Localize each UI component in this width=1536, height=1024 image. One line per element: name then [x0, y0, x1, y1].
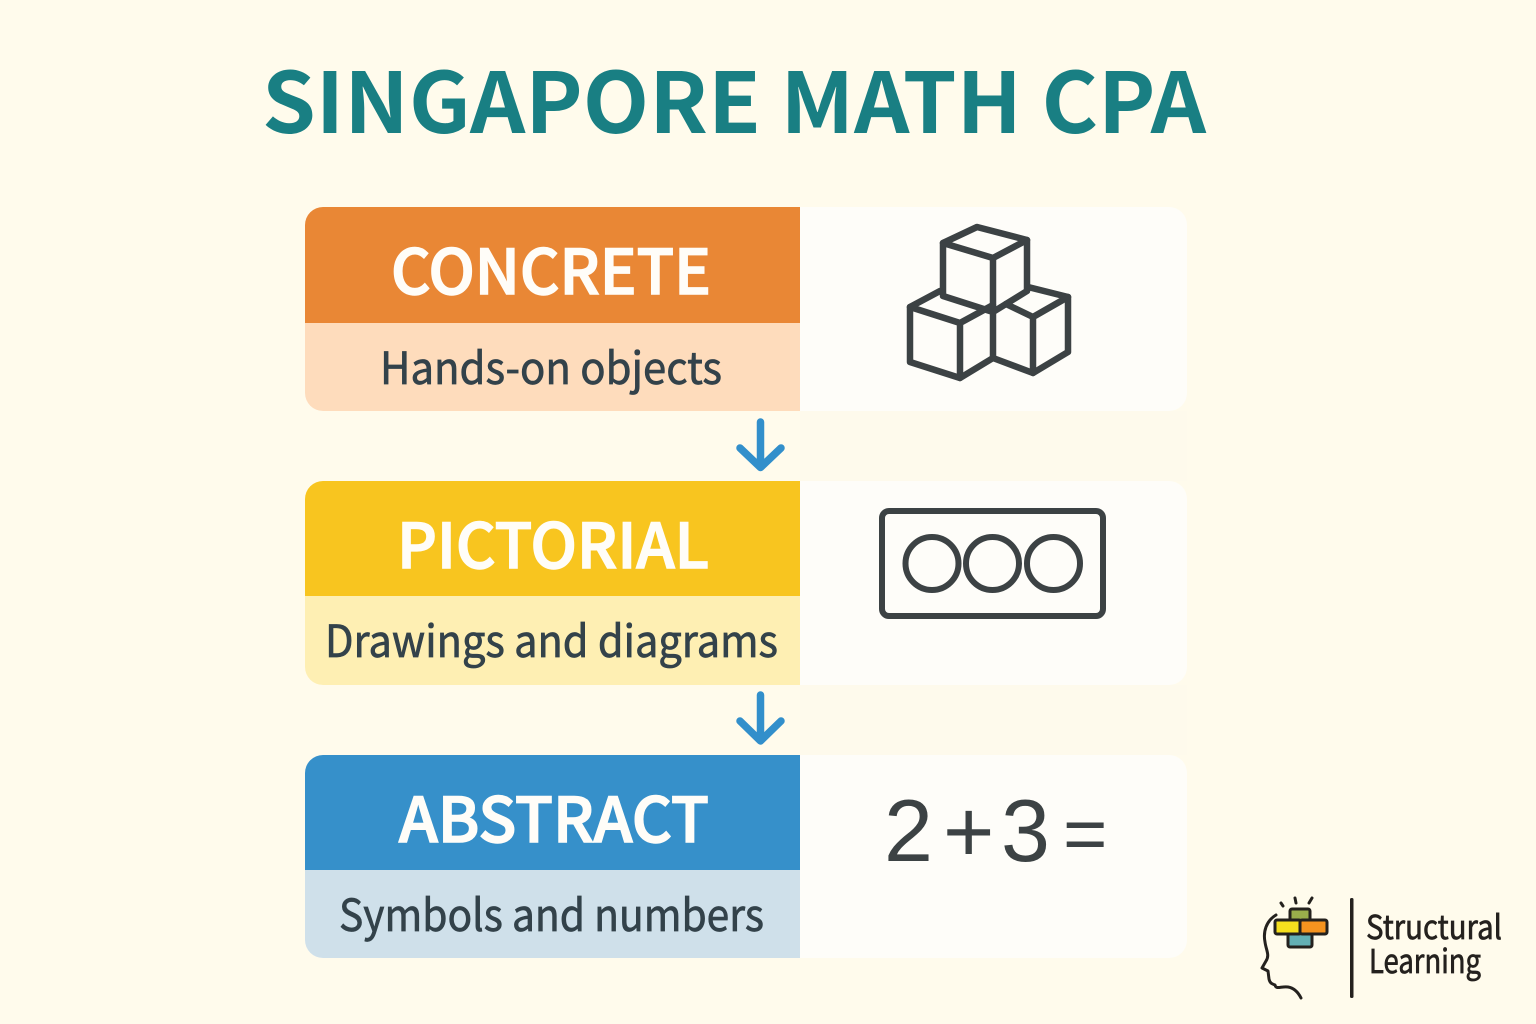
abstract description	[305, 870, 800, 958]
logo divider	[1350, 898, 1354, 998]
pictorial header	[305, 481, 800, 596]
panel: abstract	[305, 755, 1187, 958]
concrete description: Hands-on objects	[380, 333, 722, 397]
concrete header	[305, 207, 800, 323]
logo wordmark	[1366, 901, 1502, 983]
pictorial header: PICTORIAL	[397, 496, 709, 586]
arrow: pictorial to abstract	[740, 695, 781, 741]
pictorial description	[305, 596, 800, 685]
logo wordmark: Structural	[1366, 901, 1502, 949]
pictorial description: Drawings and diagrams	[325, 606, 778, 670]
icon: stacked cubes	[910, 227, 1068, 378]
abstract header: ABSTRACT	[399, 770, 709, 860]
equation: +	[943, 782, 994, 881]
icon: three circles in a box	[882, 511, 1103, 616]
icon: head with blocks	[1262, 898, 1327, 998]
panel: pictorial	[305, 481, 1187, 685]
logo: Structural Learning	[1262, 898, 1502, 998]
title: SINGAPORE MATH CPA	[262, 37, 1207, 158]
arrow: concrete to pictorial	[740, 422, 781, 468]
abstract header	[305, 755, 800, 870]
concrete description	[305, 323, 800, 411]
equation: 3	[1001, 781, 1050, 880]
equation: =	[1063, 792, 1107, 877]
equation	[888, 800, 1104, 862]
panel: concrete	[305, 207, 1187, 411]
concrete header: CONCRETE	[391, 222, 711, 312]
abstract description: Symbols and numbers	[339, 880, 764, 944]
logo wordmark: Learning	[1369, 935, 1481, 983]
equation: 2	[884, 781, 933, 880]
